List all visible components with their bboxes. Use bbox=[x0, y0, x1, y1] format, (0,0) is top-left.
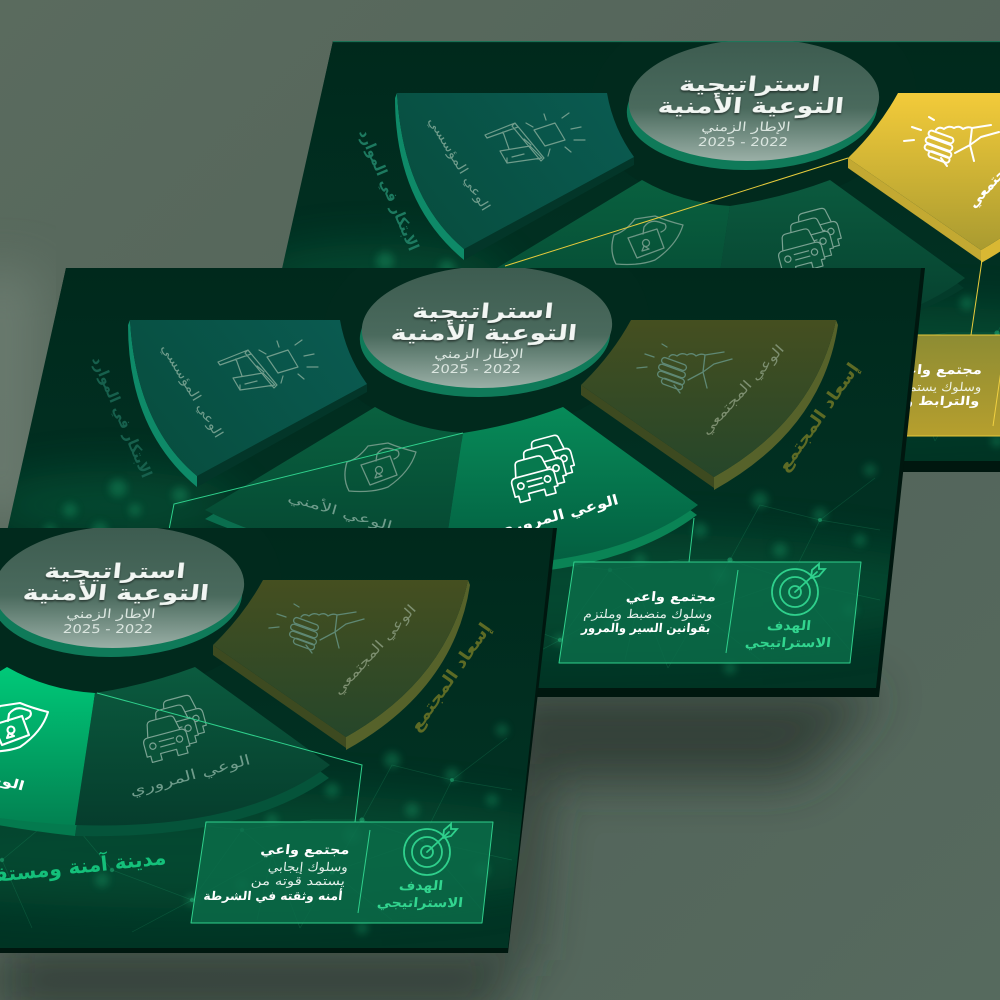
segment: security: الوعي الأمني bbox=[553, 261, 661, 308]
icon: target bbox=[404, 824, 457, 875]
goal box: وسلوك إيجابي bbox=[267, 860, 349, 875]
segment: community dim: الوعي المجتمعي bbox=[330, 602, 420, 698]
goal box: والترابط والتلاحم bbox=[854, 394, 980, 409]
segment: traffic active: الوعي المروري bbox=[496, 492, 620, 541]
goal box: وسلوك منضبط وملتزم bbox=[583, 607, 713, 622]
wheel hub bbox=[579, 0, 927, 206]
central disc bbox=[354, 266, 618, 397]
segment: traffic dim bbox=[75, 667, 330, 836]
goal box: يستمد قوته من bbox=[250, 874, 346, 889]
segment: security bbox=[205, 407, 463, 528]
segment: institutional bbox=[395, 93, 634, 260]
goal box: أمنه وثقته في الشرطة bbox=[203, 888, 343, 904]
connector bbox=[97, 693, 362, 822]
segment: institutional: الوعي المؤسسي bbox=[158, 342, 226, 441]
goal box: مجتمع واعي bbox=[260, 843, 350, 858]
segment: traffic bbox=[721, 180, 964, 304]
wheel hub bbox=[0, 481, 292, 693]
goal box: مجتمع واعي bbox=[891, 363, 983, 378]
side label: resources: الابتكار في الموارد bbox=[88, 354, 156, 480]
side label: resources: الابتكار في الموارد bbox=[355, 127, 423, 253]
goal box: بقوانين السير والمرور bbox=[580, 621, 711, 636]
central disc: التوعية الأمنية bbox=[657, 92, 845, 118]
central disc: الإطار الزمني bbox=[66, 606, 156, 622]
board 2: traffic highlight bbox=[8, 268, 925, 697]
central disc: الإطار الزمني bbox=[434, 346, 524, 362]
segment: security: الوعي الأمني bbox=[286, 488, 394, 535]
icon: target bbox=[772, 564, 825, 615]
segment: community active bbox=[848, 93, 1000, 263]
central disc: التوعية الأمنية bbox=[390, 319, 578, 345]
board 3 slab bbox=[239, 41, 1000, 472]
connector bbox=[505, 158, 982, 335]
goal box: وسلوك يستمد قوته من bbox=[852, 380, 982, 395]
side label: community: إسعاد المجتمع bbox=[406, 619, 496, 736]
goal box: الاستراتيجي bbox=[744, 636, 832, 651]
segment: community dim bbox=[213, 580, 470, 750]
central disc: الإطار الزمني bbox=[701, 119, 791, 135]
goal box: مجتمع واعي bbox=[625, 590, 717, 605]
disc title: استراتيجية bbox=[678, 72, 822, 96]
board 3: community highlight bbox=[282, 41, 1000, 472]
central disc: 2025 - 2022 bbox=[697, 135, 789, 149]
central disc: التوعية الأمنية bbox=[22, 579, 210, 605]
goal box bbox=[191, 822, 493, 923]
segment: institutional bbox=[128, 320, 367, 487]
disc title: استراتيجية bbox=[43, 559, 187, 583]
connectors bbox=[168, 433, 694, 562]
segment: security bbox=[497, 180, 730, 268]
central disc bbox=[621, 39, 885, 170]
disc title: استراتيجية bbox=[411, 299, 555, 323]
side label: community: إسعاد المجتمع bbox=[774, 359, 864, 476]
segment: community dim bbox=[581, 320, 838, 490]
segment: community dim: الوعي المجتمعي bbox=[698, 342, 788, 438]
board 1: security highlight bbox=[0, 528, 557, 953]
central disc: 2025 - 2022 bbox=[430, 362, 522, 376]
shadows under the boards bbox=[0, 690, 884, 1000]
segment: traffic dim: الوعي المروري bbox=[128, 752, 252, 800]
segment: security active bbox=[0, 667, 95, 836]
central disc bbox=[0, 526, 250, 657]
board 1 slab bbox=[0, 528, 557, 953]
goal box bbox=[559, 562, 861, 663]
board 2 slab bbox=[0, 268, 925, 697]
wheel hub bbox=[312, 221, 660, 433]
central disc: 2025 - 2022 bbox=[62, 622, 154, 636]
segment: institutional: الوعي المؤسسي bbox=[425, 115, 493, 214]
goal box: الاستراتيجي bbox=[376, 896, 464, 911]
segment: traffic active bbox=[443, 407, 698, 575]
goal box: الهدف bbox=[766, 619, 812, 634]
goal box: الهدف bbox=[398, 879, 444, 894]
goal box bbox=[906, 334, 1000, 436]
